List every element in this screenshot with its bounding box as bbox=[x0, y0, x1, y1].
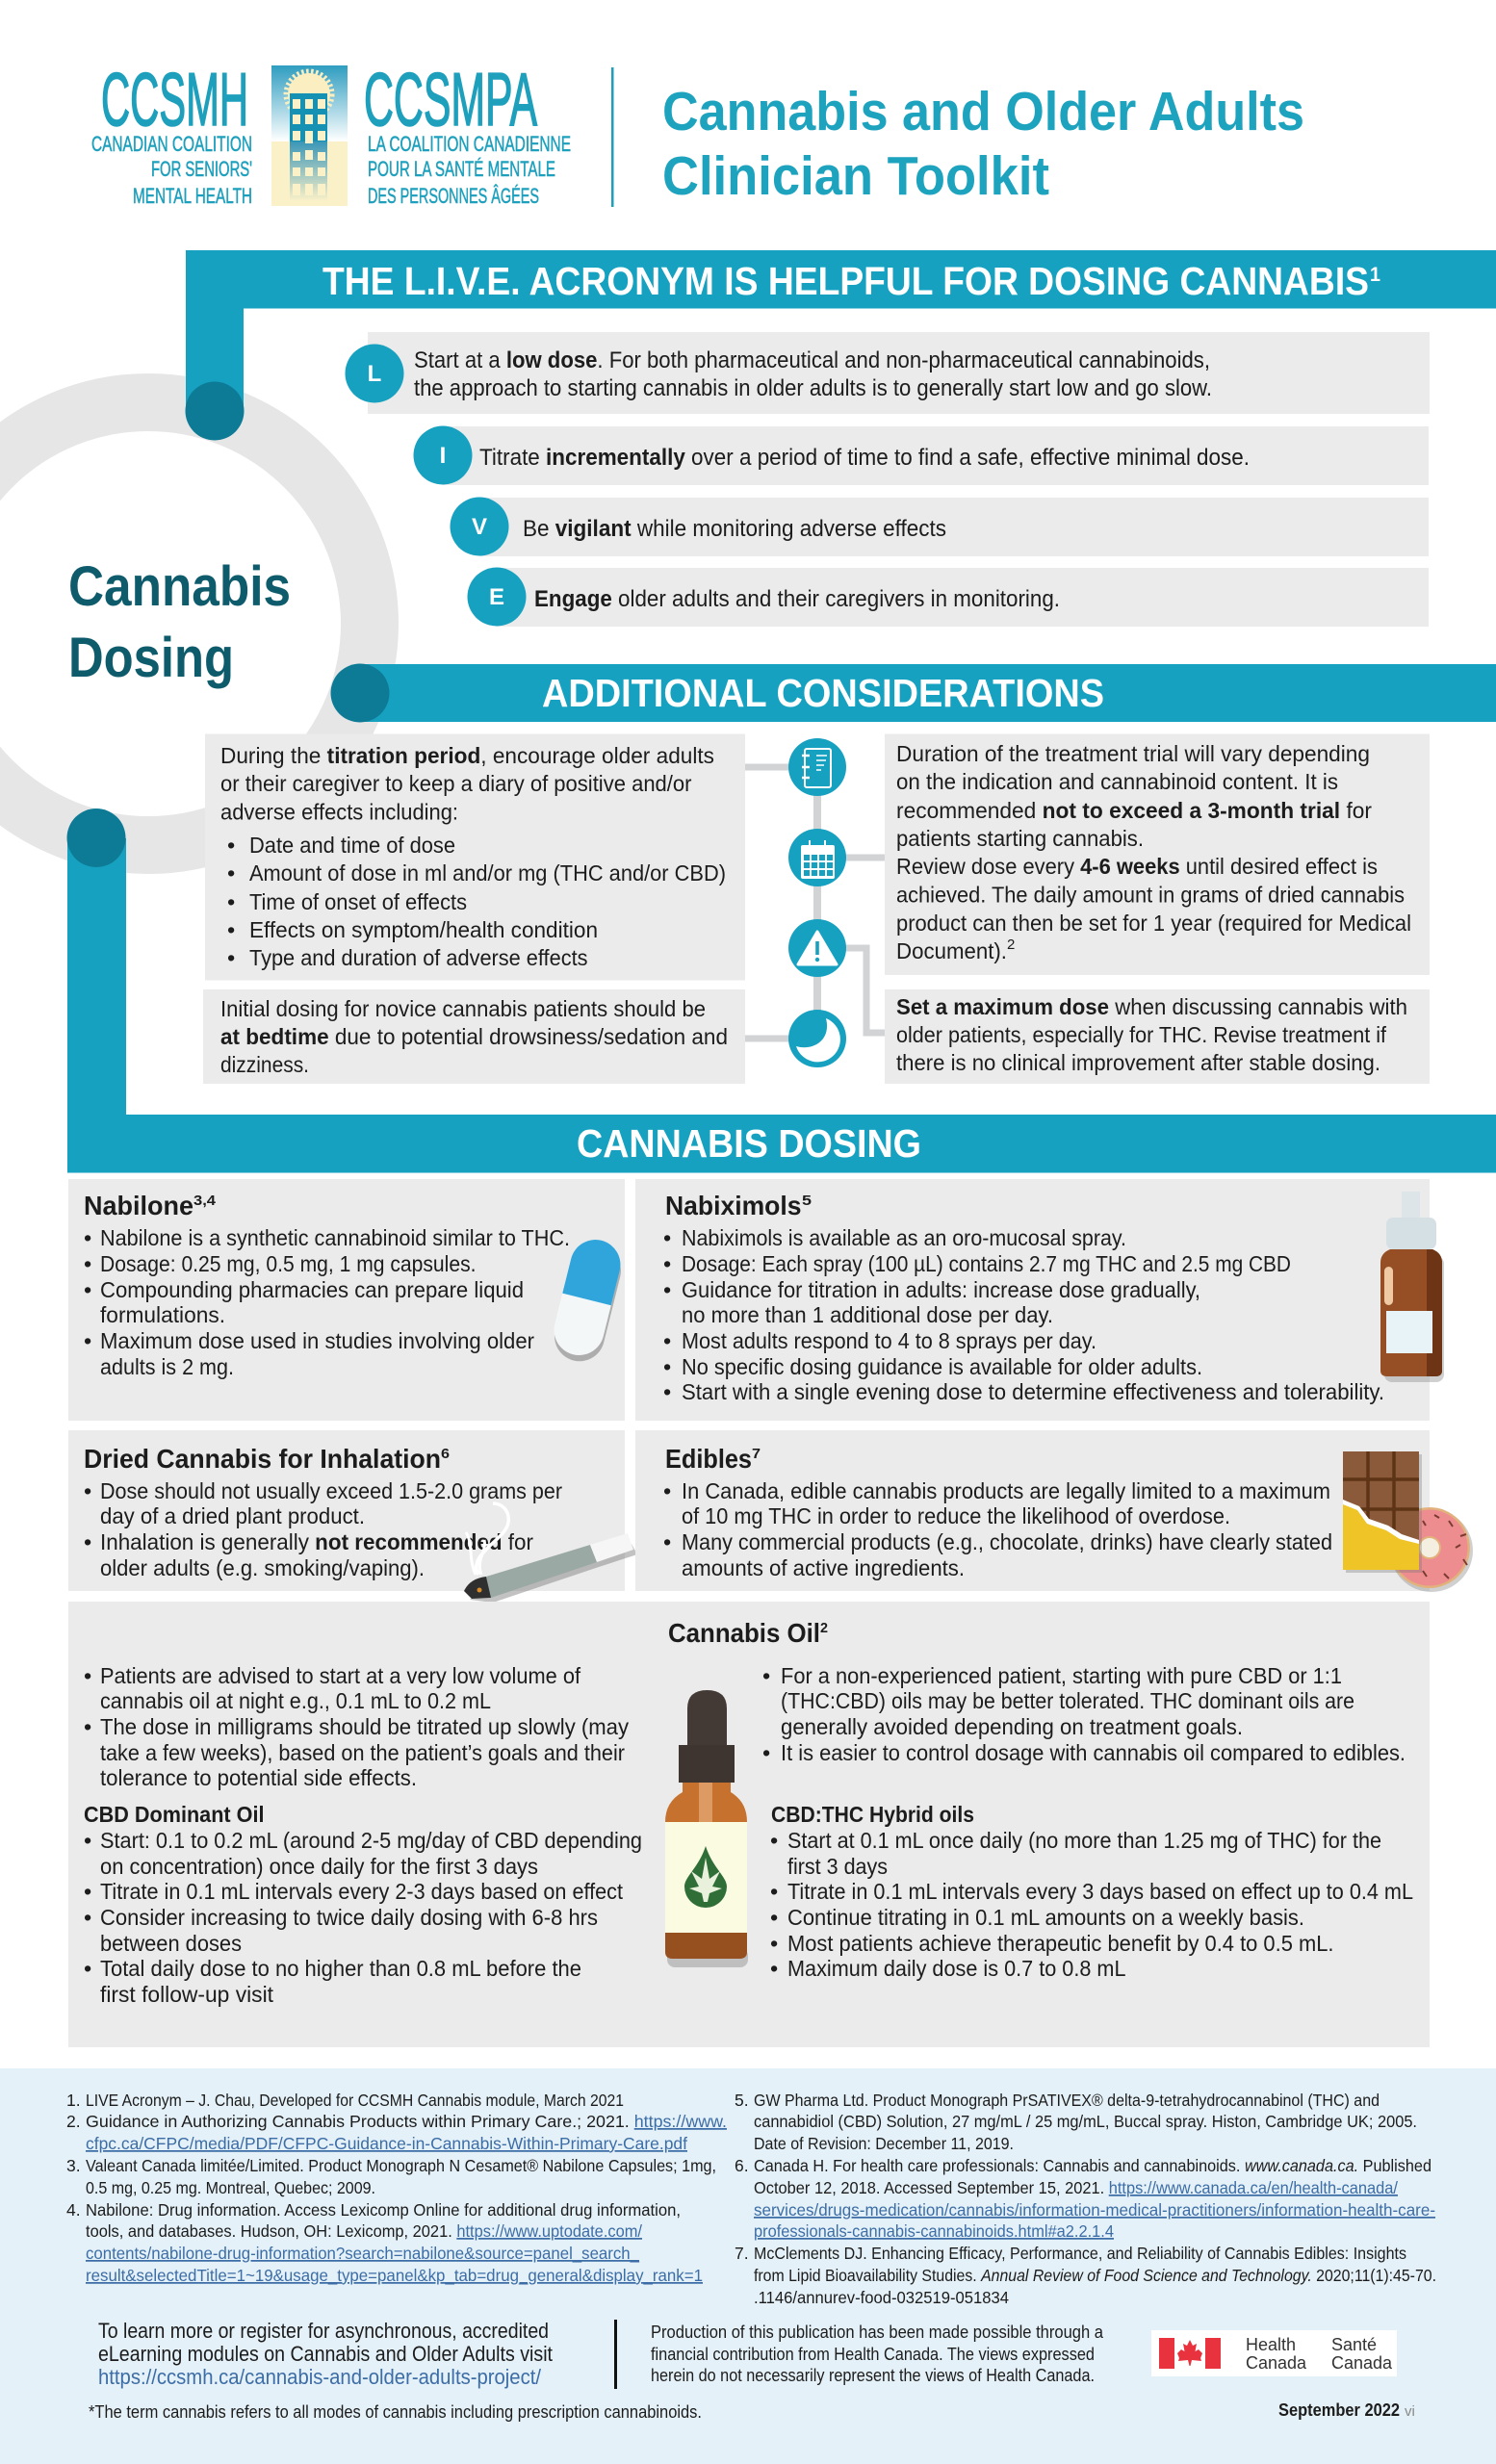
panel: Nabiximols: • bbox=[663, 1379, 671, 1404]
footnote: *The term cannabis refers to all modes of cannabis including prescription cannabinoids. bbox=[89, 2401, 702, 2422]
panel: titration period diary: Effects on symptom/health condition bbox=[249, 917, 598, 942]
panel: Dried Cannabis for Inhalation: • bbox=[84, 1529, 91, 1554]
text block: CBD dominant oil: CBD Dominant Oil bbox=[84, 1802, 264, 1827]
references: right column: professionals-cannabis-cannabinoids.html#a2.2.1.4 bbox=[754, 2221, 1114, 2241]
panel: Nabiximols: • bbox=[663, 1277, 671, 1302]
references: right column: from Lipid Bioavailability Studies. Annual Review of Food Science and Technology. 2020;11(1):45-70. bbox=[754, 2266, 1436, 2285]
references: left column: cfpc.ca/CFPC/media/PDF/CFPC-Guidance-in-Cannabis-Within-Primary-Care.pdf bbox=[86, 2134, 687, 2153]
panel: duration of treatment trial: on the indication and cannabinoid content. It is bbox=[896, 769, 1338, 794]
panel: Nabiximols: Guidance for titration in adults: increase dose gradually, bbox=[682, 1277, 1200, 1302]
panel: Nabilone: Dosage: 0.25 mg, 0.5 mg, 1 mg capsules. bbox=[100, 1251, 476, 1276]
L.I.V.E. item: I bbox=[414, 425, 1429, 485]
L.I.V.E. item: L bbox=[345, 332, 1430, 414]
text block: CBD:THC hybrid oils: CBD:THC Hybrid oils bbox=[771, 1802, 974, 1827]
banner: L.I.V.E. acronym bbox=[185, 250, 1496, 441]
footer background bbox=[0, 2068, 1496, 2464]
text block: CBD:THC hybrid oils: • bbox=[770, 1931, 778, 1956]
panel: Edibles: • bbox=[663, 1478, 671, 1503]
text block: non-experienced patients: • bbox=[762, 1663, 770, 1688]
references: right column: McClements DJ. Enhancing Efficacy, Performance, and Reliability of Cannabis Edibles: Insights bbox=[754, 2244, 1406, 2263]
banner: Additional Considerations bbox=[331, 664, 1496, 722]
references: right column: 5. bbox=[735, 2091, 749, 2110]
panel: Dried Cannabis for Inhalation: • bbox=[84, 1478, 91, 1503]
logo tagline: English: FOR SENIORS' bbox=[151, 157, 252, 181]
text block: CBD:THC hybrid oils: • bbox=[770, 1828, 778, 1853]
panel: Nabiximols: Dosage: Each spray (100 µL) contains 2.7 mg THC and 2.5 mg CBD bbox=[682, 1251, 1291, 1276]
icon: moon bbox=[788, 1010, 846, 1067]
panel: set a maximum dose bbox=[885, 989, 1430, 1084]
logo: Health Canada: Health bbox=[1246, 2335, 1296, 2354]
panel: Dried Cannabis for Inhalation: older adults (e.g. smoking/vaping). bbox=[100, 1555, 425, 1580]
icon: joint with smoke bbox=[464, 1503, 637, 1603]
panel: duration of treatment trial: Duration of the treatment trial will vary depending bbox=[896, 741, 1370, 766]
panel: duration of treatment trial bbox=[885, 733, 1430, 975]
icon: spray bottle bbox=[1380, 1192, 1444, 1382]
panel: Nabiximols: Most adults respond to 4 to 8 sprays per day. bbox=[682, 1328, 1096, 1353]
text block: CBD dominant oil: Consider increasing to twice daily dosing with 6-8 hrs bbox=[100, 1905, 598, 1930]
L.I.V.E. item: E: Engage older adults and their caregivers in monitoring. bbox=[534, 586, 1060, 612]
panel: Nabilone: adults is 2 mg. bbox=[100, 1354, 234, 1379]
text block: CBD dominant oil: Total daily dose to no higher than 0.8 mL before the bbox=[100, 1956, 581, 1981]
logo wordmark: CCSMH: CCSMH bbox=[101, 57, 248, 141]
text block: CBD dominant oil: • bbox=[84, 1828, 91, 1853]
panel: Nabiximols: no more than 1 additional dose per day. bbox=[682, 1302, 1053, 1327]
panel: titration period diary: Amount of dose in ml and/or mg (THC and/or CBD) bbox=[249, 860, 726, 886]
text block: CBD:THC hybrid oils: • bbox=[770, 1956, 778, 1981]
panel: Nabilone: • bbox=[84, 1328, 91, 1353]
references: left column: Nabilone: Drug information. Access Lexicomp Online for additional drug information, bbox=[86, 2200, 681, 2220]
icon: notebook bbox=[788, 738, 846, 796]
references: right column: .1146/annurev-food-032519-051834 bbox=[754, 2288, 1009, 2307]
heading: Dried Cannabis for Inhalation: Dried Cannabis for Inhalation bbox=[84, 1444, 441, 1474]
banner: L.I.V.E. acronym: 1 bbox=[1370, 264, 1380, 286]
panel: titration period diary: adverse effects including: bbox=[220, 799, 458, 824]
panel: initial dosing at bedtime: Initial dosing for novice cannabis patients should be bbox=[220, 996, 706, 1021]
panel: Nabiximols: No specific dosing guidance is available for older adults. bbox=[682, 1354, 1202, 1379]
panel: duration of treatment trial: Review dose every 4-6 weeks until desired effect is bbox=[896, 854, 1378, 879]
panel: Edibles: amounts of active ingredients. bbox=[682, 1555, 965, 1580]
L.I.V.E. item: I: Titrate incrementally over a period of time to find a safe, effective minimal dose. bbox=[479, 445, 1250, 471]
text block: general oil advice: tolerance to potential side effects. bbox=[100, 1765, 417, 1790]
text block: CBD:THC hybrid oils: Start at 0.1 mL once daily (no more than 1.25 mg of THC) for the bbox=[787, 1828, 1381, 1853]
panel: duration of treatment trial: 2 bbox=[1007, 937, 1015, 953]
panel: titration period diary: Date and time of dose bbox=[249, 833, 455, 858]
text block: non-experienced patients: For a non-experienced patient, starting with pure CBD or 1:1 bbox=[781, 1663, 1342, 1688]
panel: Edibles: • bbox=[663, 1529, 671, 1554]
references: left column: 2. bbox=[66, 2112, 81, 2131]
L.I.V.E. item: L: L bbox=[368, 361, 381, 387]
banner: L.I.V.E. acronym: THE L.I.V.E. ACRONYM IS HELPFUL FOR DOSING CANNABIS bbox=[322, 259, 1369, 303]
panel: Dried Cannabis for Inhalation: day of a dried plant product. bbox=[100, 1503, 365, 1528]
text block: general oil advice: take a few weeks), based on the patient’s goals and their bbox=[100, 1740, 625, 1765]
panel: Dried Cannabis for Inhalation: Dose should not usually exceed 1.5-2.0 grams per bbox=[100, 1478, 562, 1503]
text block: general oil advice: cannabis oil at night e.g., 0.1 mL to 0.2 mL bbox=[100, 1688, 491, 1713]
logo: Health Canada bbox=[1151, 2330, 1397, 2376]
references: left column: 1. bbox=[66, 2091, 81, 2110]
logo tagline: English bbox=[91, 132, 252, 208]
icon: calendar bbox=[788, 829, 846, 886]
callout: eLearning modules: To learn more or register for asynchronous, accredited bbox=[98, 2319, 549, 2343]
text block: general oil advice: Patients are advised to start at a very low volume of bbox=[100, 1663, 580, 1688]
text block: general oil advice bbox=[84, 1663, 629, 1790]
panel: Nabiximols: Nabiximols is available as an oro-mucosal spray. bbox=[682, 1225, 1126, 1250]
references: left column: Valeant Canada limitée/Limited. Product Monograph N Cesamet® Nabilone Capsules; 1mg, bbox=[86, 2156, 716, 2175]
panel: duration of treatment trial: patients starting cannabis. bbox=[896, 826, 1144, 851]
heading: Nabiximols: 5 bbox=[802, 1193, 812, 1209]
L.I.V.E. item: L: the approach to starting cannabis in older adults is to generally start low and go slow. bbox=[414, 375, 1212, 401]
panel: Nabilone bbox=[68, 1179, 625, 1421]
logo: Health Canada: Canada bbox=[1331, 2353, 1393, 2373]
title: Clinician Toolkit bbox=[662, 145, 1049, 207]
logo tagline: French: LA COALITION CANADIENNE bbox=[368, 132, 571, 156]
heading: Dried Cannabis for Inhalation: 6 bbox=[441, 1446, 450, 1462]
text block: CBD:THC hybrid oils: • bbox=[770, 1905, 778, 1930]
text block: CBD dominant oil: • bbox=[84, 1879, 91, 1904]
section title: Cannabis Dosing bbox=[68, 555, 291, 689]
connector lines between icons and panels bbox=[745, 764, 885, 1041]
references: left column: LIVE Acronym – J. Chau, Developed for CCSMH Cannabis module, March 2021 bbox=[86, 2091, 624, 2110]
panel: Dried Cannabis for Inhalation: Inhalation is generally not recommended for bbox=[100, 1529, 533, 1554]
panel: Nabiximols: • bbox=[663, 1251, 671, 1276]
L.I.V.E. item: V: Be vigilant while monitoring adverse effects bbox=[523, 516, 946, 542]
text block: CBD dominant oil: • bbox=[84, 1956, 91, 1981]
funding statement: financial contribution from Health Canada. The views expressed bbox=[651, 2344, 1095, 2364]
text block: CBD:THC hybrid oils: Continue titrating in 0.1 mL amounts on a weekly basis. bbox=[787, 1905, 1304, 1930]
panel: initial dosing at bedtime: dizziness. bbox=[220, 1052, 309, 1077]
L.I.V.E. item: L: Start at a low dose. For both pharmaceutical and non-pharmaceutical cannabinoids, bbox=[414, 347, 1210, 373]
text block: CBD dominant oil: between doses bbox=[100, 1931, 242, 1956]
icon: capsule bbox=[548, 1235, 628, 1367]
L.I.V.E. item: I: I bbox=[440, 443, 446, 469]
panel: duration of treatment trial: product can then be set for 1 year (required for Medical bbox=[896, 911, 1411, 936]
panel: Nabiximols: • bbox=[663, 1328, 671, 1353]
references: left column: result&selectedTitle=1~19&usage_type=panel&kp_tab=drug_general&display_rank=1 bbox=[86, 2266, 703, 2286]
panel: set a maximum dose: Set a maximum dose when discussing cannabis with bbox=[896, 994, 1407, 1019]
references: right column: cannabidiol (CBD) Solution, 27 mg/mL / 25 mg/mL, Buccal spray. Histon, Cambridge UK; 2005. bbox=[754, 2112, 1417, 2131]
L.I.V.E. item: E: E bbox=[489, 584, 504, 610]
text block: CBD:THC hybrid oils: Titrate in 0.1 mL intervals every 3 days based on effect up to 0.4 mL bbox=[787, 1879, 1413, 1904]
heading: Cannabis Oil: 2 bbox=[820, 1620, 828, 1636]
L.I.V.E. item: E bbox=[468, 568, 1429, 627]
panel: Edibles: In Canada, edible cannabis products are legally limited to a maximum bbox=[682, 1478, 1330, 1503]
funding statement: Production of this publication has been made possible through a bbox=[651, 2322, 1104, 2342]
panel: Nabiximols: Start with a single evening dose to determine effectiveness and tolerability. bbox=[682, 1379, 1384, 1404]
references: right column: October 12, 2018. Accessed September 15, 2021. https://www.canada.ca/en/health-canada/ bbox=[754, 2178, 1398, 2197]
panel: Nabiximols: • bbox=[663, 1354, 671, 1379]
panel: titration period diary bbox=[205, 733, 745, 980]
references: right column: GW Pharma Ltd. Product Monograph PrSATIVEX® delta-9-tetrahydrocannabinol (THC) and bbox=[754, 2091, 1380, 2110]
banner: Additional Considerations: ADDITIONAL CONSIDERATIONS bbox=[542, 671, 1104, 715]
references: right column: 6. bbox=[735, 2156, 749, 2175]
text block: CBD dominant oil bbox=[84, 1802, 642, 2007]
text block: CBD:THC hybrid oils: Most patients achieve therapeutic benefit by 0.4 to 0.5 mL. bbox=[787, 1931, 1334, 1956]
panel: set a maximum dose: there is no clinical improvement after stable dosing. bbox=[896, 1050, 1380, 1075]
text block: non-experienced patients: It is easier to control dosage with cannabis oil compared to edibles. bbox=[781, 1740, 1406, 1765]
L.I.V.E. item: V: V bbox=[472, 514, 487, 540]
logo: Health Canada: Canada bbox=[1246, 2353, 1307, 2373]
panel: titration period diary: or their caregiver to keep a diary of positive and/or bbox=[220, 771, 692, 796]
text block: general oil advice: • bbox=[84, 1714, 91, 1739]
funding statement: herein do not necessarily represent the views of Health Canada. bbox=[651, 2365, 1095, 2385]
panel: titration period diary: • bbox=[227, 833, 235, 858]
text block: non-experienced patients: • bbox=[762, 1740, 770, 1765]
panel: Nabiximols: • bbox=[663, 1225, 671, 1250]
panel: Nabilone: Nabilone is a synthetic cannabinoid similar to THC. bbox=[100, 1225, 570, 1250]
logo tagline: French: DES PERSONNES ÂGÉES bbox=[368, 184, 539, 208]
heading: Nabilone: 3,4 bbox=[193, 1193, 217, 1209]
panel: Nabilone: formulations. bbox=[100, 1302, 225, 1327]
panel: duration of treatment trial: achieved. The daily amount in grams of dried cannabis bbox=[896, 882, 1405, 907]
title bbox=[662, 81, 1304, 207]
panel: Edibles: Many commercial products (e.g., chocolate, drinks) have clearly stated bbox=[682, 1529, 1332, 1554]
panel: titration period diary: • bbox=[227, 945, 235, 970]
references: left column: Guidance in Authorizing Cannabis Products within Primary Care.; 2021. https://www. bbox=[86, 2112, 727, 2131]
text block: non-experienced patients bbox=[762, 1663, 1406, 1765]
panel: titration period diary: • bbox=[227, 860, 235, 886]
panel: Nabilone: • bbox=[84, 1251, 91, 1276]
panel: Cannabis Oil bbox=[68, 1602, 1430, 2047]
panel: Dried Cannabis for Inhalation bbox=[68, 1430, 625, 1591]
panel: Nabiximols bbox=[635, 1179, 1430, 1421]
icon: warning triangle bbox=[788, 919, 846, 977]
callout: eLearning modules: eLearning modules on Cannabis and Older Adults visit bbox=[98, 2342, 553, 2366]
heading: Cannabis Oil: Cannabis Oil bbox=[668, 1618, 820, 1648]
heading: Nabilone: Nabilone bbox=[84, 1191, 193, 1220]
references: left column: 0.5 mg, 0.25 mg. Montreal, Quebec; 2009. bbox=[86, 2178, 375, 2197]
panel: initial dosing at bedtime bbox=[203, 989, 745, 1084]
section title: Cannabis Dosing: Cannabis bbox=[68, 555, 291, 618]
references: left column: contents/nabilone-drug-information?search=nabilone&source=panel_search_ bbox=[86, 2244, 639, 2264]
panel: titration period diary: Type and duration of adverse effects bbox=[249, 945, 587, 970]
decorative ring: grey circle behind section title bbox=[0, 402, 370, 845]
panel: titration period diary: Time of onset of effects bbox=[249, 889, 467, 914]
panel: titration period diary: During the titration period, encourage older adults bbox=[220, 743, 714, 768]
callout: eLearning modules: https://ccsmh.ca/cannabis-and-older-adults-project/ bbox=[98, 2365, 542, 2389]
section title: Cannabis Dosing: Dosing bbox=[68, 627, 234, 689]
text block: CBD dominant oil: on concentration) once daily for the first 3 days bbox=[100, 1854, 538, 1879]
references: right column: Canada H. For health care professionals: Cannabis and cannabinoids. www.canada.ca. Published bbox=[754, 2156, 1432, 2175]
references: right column: services/drugs-medication/cannabis/information-medical-practitioners/information-health-care- bbox=[754, 2200, 1435, 2220]
references: right column: Date of Revision: December 11, 2019. bbox=[754, 2134, 1014, 2153]
references: right column bbox=[735, 2091, 1436, 2307]
panel: Nabilone: Compounding pharmacies can prepare liquid bbox=[100, 1277, 524, 1302]
panel: Edibles: of 10 mg THC in order to reduce the likelihood of overdose. bbox=[682, 1503, 1230, 1528]
logo tagline: English: CANADIAN COALITION bbox=[91, 132, 252, 156]
panel: set a maximum dose: older patients, especially for THC. Revise treatment if bbox=[896, 1022, 1386, 1047]
references: left column: tools, and databases. Hudson, OH: Lexicomp, 2021. https://www.uptodate.com/ bbox=[86, 2221, 642, 2241]
panel: Edibles bbox=[635, 1430, 1430, 1591]
date and page number: vi bbox=[1405, 2403, 1415, 2420]
date and page number: September 2022 bbox=[1278, 2400, 1400, 2420]
panel: duration of treatment trial: recommended not to exceed a 3-month trial for bbox=[896, 798, 1372, 823]
panel: Nabilone: • bbox=[84, 1225, 91, 1250]
funding statement bbox=[651, 2322, 1104, 2385]
heading: Nabiximols: Nabiximols bbox=[665, 1191, 801, 1220]
callout: eLearning modules bbox=[98, 2319, 553, 2389]
text block: general oil advice: • bbox=[84, 1663, 91, 1688]
logo tagline: French: POUR LA SANTÉ MENTALE bbox=[368, 157, 555, 181]
panel: initial dosing at bedtime: at bedtime due to potential drowsiness/sedation and bbox=[220, 1024, 728, 1049]
text block: CBD:THC hybrid oils bbox=[770, 1802, 1413, 1981]
text block: CBD:THC hybrid oils: Maximum daily dose is 0.7 to 0.8 mL bbox=[787, 1956, 1126, 1981]
heading: Edibles: Edibles bbox=[665, 1444, 752, 1474]
icon: oil dropper bottle bbox=[665, 1690, 748, 1967]
references: left column: 4. bbox=[66, 2200, 81, 2220]
logo icon: building and sun bbox=[271, 65, 348, 206]
text block: CBD dominant oil: Start: 0.1 to 0.2 mL (around 2-5 mg/day of CBD depending bbox=[100, 1828, 642, 1853]
text block: non-experienced patients: (THC:CBD) oils may be better tolerated. THC dominant oils are bbox=[781, 1688, 1354, 1713]
title: Cannabis and Older Adults bbox=[662, 81, 1304, 142]
logo wordmark: CCSMPA: CCSMPA bbox=[364, 57, 537, 141]
panel: Nabilone: Maximum dose used in studies involving older bbox=[100, 1328, 534, 1353]
text block: general oil advice: The dose in milligrams should be titrated up slowly (may bbox=[100, 1714, 629, 1739]
text block: CBD:THC hybrid oils: first 3 days bbox=[787, 1854, 888, 1879]
panel: titration period diary: • bbox=[227, 917, 235, 942]
panel: titration period diary: • bbox=[227, 889, 235, 914]
logo tagline: English: MENTAL HEALTH bbox=[133, 184, 252, 208]
logo: CCSMH CCSMPA bbox=[91, 57, 571, 208]
references: left column bbox=[66, 2091, 727, 2286]
text block: CBD:THC hybrid oils: • bbox=[770, 1879, 778, 1904]
heading: Edibles: 7 bbox=[752, 1446, 761, 1462]
text block: CBD dominant oil: • bbox=[84, 1905, 91, 1930]
logo tagline: French bbox=[368, 132, 571, 208]
banner: Cannabis Dosing: CANNABIS DOSING bbox=[577, 1121, 921, 1166]
references: left column: 3. bbox=[66, 2156, 81, 2175]
logo: Health Canada: Santé bbox=[1331, 2335, 1377, 2354]
panel: Nabilone: • bbox=[84, 1277, 91, 1302]
L.I.V.E. item: V bbox=[451, 497, 1429, 556]
panel: duration of treatment trial: Document). bbox=[896, 938, 1007, 963]
text block: CBD dominant oil: Titrate in 0.1 mL intervals every 2-3 days based on effect bbox=[100, 1879, 623, 1904]
banner: Cannabis Dosing bbox=[67, 808, 1496, 1172]
text block: CBD dominant oil: first follow-up visit bbox=[100, 1982, 273, 2007]
text block: non-experienced patients: generally avoided depending on treatment goals. bbox=[781, 1714, 1243, 1739]
references: right column: 7. bbox=[735, 2244, 749, 2263]
icon: chocolate bar and donut bbox=[1343, 1451, 1473, 1592]
